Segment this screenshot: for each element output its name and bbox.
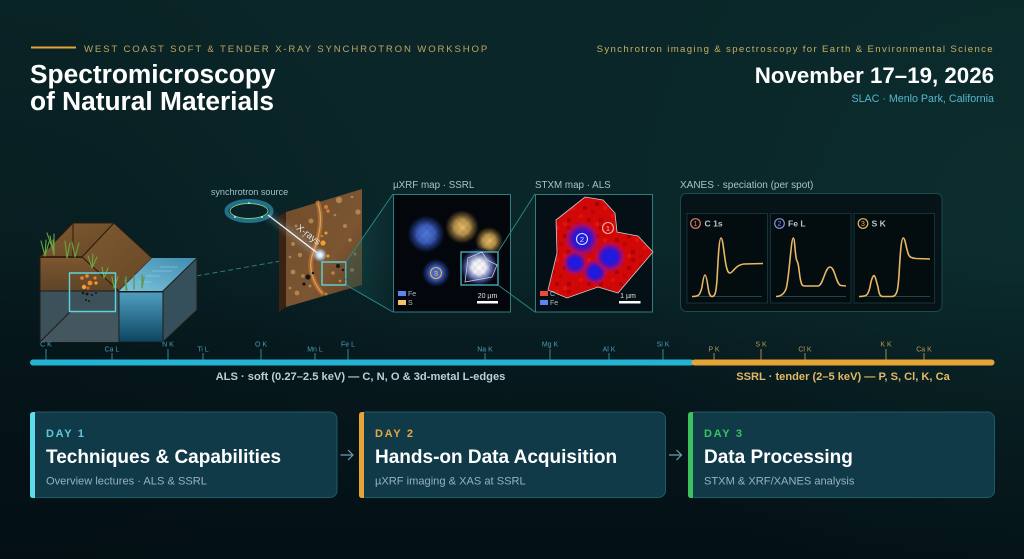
event date: November 17–19, 2026 bbox=[755, 63, 994, 88]
energy axis: absorption edge ticks: Na K bbox=[477, 346, 493, 354]
legend bbox=[540, 291, 558, 307]
panel heading: STXM map: STXM map · ALS bbox=[535, 180, 611, 191]
energy axis: absorption edge ticks: C K bbox=[40, 342, 52, 348]
energy axis: absorption edge ticks: Si K bbox=[657, 342, 670, 348]
legend: S bbox=[408, 300, 413, 307]
card: Day 3: STXM & XRF/XANES analysis bbox=[704, 476, 855, 488]
illustration: soil and water landscape block bbox=[40, 223, 197, 342]
card: Day 3: Data Processing bbox=[704, 447, 853, 468]
panel: uXRF map bbox=[394, 194, 510, 312]
arrow: day 2 to day 3 bbox=[669, 450, 682, 460]
water body bbox=[119, 258, 197, 342]
connector cone: XRF to STXM bbox=[498, 194, 535, 312]
scale bar 1 um: 1 µm bbox=[620, 293, 636, 300]
label: ALS range: ALS · soft (0.27–2.5 keV) — C, N, O & 3d-metal L-edges bbox=[216, 371, 505, 383]
spectrum: C 1s bbox=[687, 214, 768, 303]
card: Day 1 bbox=[30, 412, 337, 498]
sediment grains bbox=[289, 196, 361, 296]
energy axis: absorption edge ticks: S K bbox=[755, 342, 767, 348]
legend: C bbox=[550, 291, 555, 298]
energy axis: absorption edge ticks: Mn L bbox=[307, 346, 323, 354]
card: Day 3 bbox=[688, 412, 994, 498]
subtitle: theme: Synchrotron imaging & spectroscopy for Earth & Environmental Science bbox=[597, 44, 994, 55]
legend bbox=[398, 291, 416, 307]
energy axis: absorption edge ticks: Fe L bbox=[341, 342, 355, 348]
card: Day 2: Hands-on Data Acquisition bbox=[375, 447, 617, 468]
zoom box on section bbox=[322, 262, 346, 285]
card: Day 3: DAY 3 bbox=[704, 428, 744, 440]
spectrum: S K: 3 bbox=[861, 221, 865, 228]
scale bar 20 um: 20 µm bbox=[478, 293, 497, 300]
spectrum: Fe L: Fe L bbox=[788, 218, 806, 228]
label: X-rays: X-rays bbox=[295, 222, 323, 247]
soil slope surfaces bbox=[40, 223, 152, 291]
spectrum: Fe L bbox=[770, 214, 851, 303]
label: synchrotron source: synchrotron source bbox=[211, 187, 288, 197]
title: of Natural Materials bbox=[30, 86, 274, 116]
connector cone: section to XRF map bbox=[346, 194, 393, 312]
root channel bbox=[311, 203, 322, 293]
spectrum: S K bbox=[854, 214, 934, 303]
subsurface sediment bbox=[40, 291, 119, 342]
header: eyebrow: WEST COAST SOFT & TENDER X-RAY SYNCHROTRON WORKSHOP bbox=[84, 44, 489, 55]
energy axis: absorption edge ticks: K K bbox=[880, 342, 892, 348]
sample selection box bbox=[70, 273, 116, 312]
energy axis: absorption edge ticks bbox=[40, 342, 932, 360]
energy axis: absorption edge ticks: Mg K bbox=[542, 342, 558, 348]
energy axis: absorption edge ticks: Ca L bbox=[105, 346, 119, 354]
energy axis: absorption edge ticks: N K bbox=[162, 342, 174, 348]
energy axis: absorption edge ticks: Cl K bbox=[798, 346, 812, 354]
spectrum: S K: S K bbox=[872, 218, 887, 228]
legend: Fe bbox=[550, 300, 558, 307]
X-ray beam bbox=[268, 215, 327, 262]
event location: SLAC · Menlo Park, California bbox=[851, 93, 994, 105]
carbon map with iron inclusions bbox=[548, 196, 654, 298]
energy axis: absorption edge ticks: O K bbox=[255, 342, 267, 348]
spot marker 3: 3 bbox=[434, 269, 438, 278]
energy axis: absorption edge ticks: Ti L bbox=[197, 346, 209, 354]
storage ring bbox=[226, 201, 272, 221]
energy bar: SSRL tender range bbox=[692, 360, 994, 366]
title: Spectromicroscopy bbox=[30, 59, 276, 89]
arrow: day 1 to day 2 bbox=[340, 450, 353, 460]
spot marker 1: 1 bbox=[606, 224, 610, 233]
spectrum: C 1s: C 1s bbox=[704, 218, 723, 228]
spectrum: Fe L: 2 bbox=[778, 221, 782, 228]
card: Day 1: Techniques & Capabilities bbox=[46, 447, 281, 468]
card: Day 1: DAY 1 bbox=[46, 428, 86, 440]
legend: Fe bbox=[408, 291, 416, 298]
panel: XANES spectra bbox=[680, 194, 942, 312]
panel heading: uXRF map: µXRF map · SSRL bbox=[393, 180, 475, 191]
card: Day 2 bbox=[359, 412, 666, 498]
energy axis: absorption edge ticks: P K bbox=[708, 346, 720, 354]
connector: landscape to section bbox=[173, 260, 287, 280]
energy axis: absorption edge ticks: Ca K bbox=[916, 346, 932, 354]
label: SSRL range: SSRL · tender (2–5 keV) — P, S, Cl, K, Ca bbox=[736, 371, 951, 383]
fluorescence hot spots bbox=[394, 195, 510, 311]
spectrum: C 1s: 1 bbox=[694, 221, 698, 228]
card: Day 1: Overview lectures · ALS & SSRL bbox=[46, 476, 207, 488]
spot marker 2: 2 bbox=[580, 235, 584, 244]
card: Day 2: DAY 2 bbox=[375, 428, 415, 440]
iron and sulfur mineral hot spots bbox=[80, 274, 98, 302]
energy axis: absorption edge ticks: Al K bbox=[603, 346, 616, 354]
mineral deposits bbox=[302, 205, 347, 286]
illustration: soil thin section bbox=[279, 189, 362, 312]
panel: STXM map bbox=[535, 194, 653, 312]
panel heading: XANES: XANES · speciation (per spot) bbox=[680, 180, 813, 191]
STXM region box bbox=[461, 252, 498, 285]
grass and reeds bbox=[41, 233, 144, 290]
illustration: synchrotron source bbox=[211, 187, 288, 221]
energy bar: ALS soft range bbox=[30, 360, 694, 366]
card: Day 2: µXRF imaging & XAS at SSRL bbox=[375, 476, 526, 488]
